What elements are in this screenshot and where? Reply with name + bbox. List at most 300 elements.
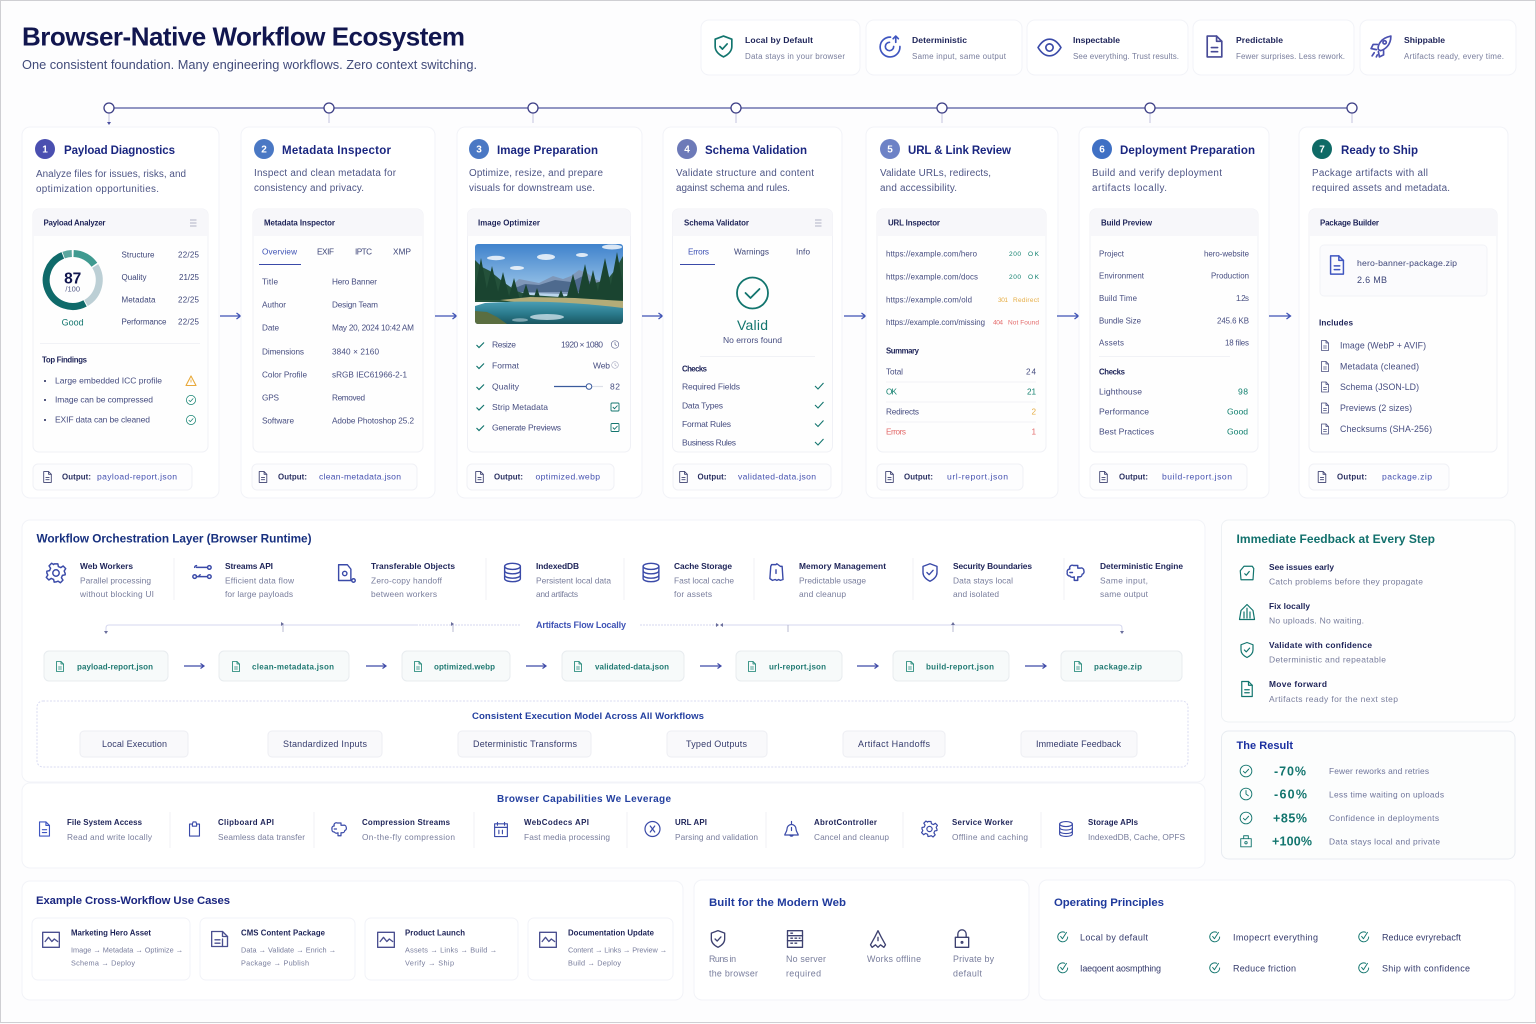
optimizer settings: Resize [492,339,516,349]
step 4 description: against schema and rules. [676,183,790,194]
URL summary: Errors [886,428,906,437]
top findings: Top Findings [42,356,88,365]
step number 5 [880,139,900,159]
step 5 description: Validate URLs, redirects, [880,168,991,179]
output chip: url-report.json [877,464,1023,490]
mock UI: Payload Analyzer [33,209,208,452]
panel: step 5 URL and Link Review [866,127,1058,498]
validator tabs: Info [796,248,810,257]
chip: Inspectable: See everything. Trust results. [1073,52,1179,61]
capability: Clipboard API [190,818,305,842]
metadata tabs [259,248,412,264]
build rows: 245.6 KB [1217,316,1249,326]
step 5 description: and accessibility. [880,183,957,194]
capability: AbrotController: AbrotController [814,818,877,827]
pill: Deterministic Transforms: Deterministic Transforms [473,739,578,749]
runtime: Deterministic Engine: same output [1100,589,1149,599]
build checks [1099,368,1248,437]
metadata rows: Design Team [332,301,378,310]
validator tabs: Errors [688,248,709,257]
metadata tabs: IPTC [355,248,372,257]
step 1 heading: Payload Diagnostics [64,145,175,157]
check list [682,364,824,448]
step 1 description [36,169,186,195]
mock UI: Payload Analyzer: Payload Analyzer [44,219,106,228]
step number 6 [1092,139,1112,159]
runtime: Security Boundaries: Security Boundaries [953,561,1032,571]
pill: Local Execution: Local Execution [102,739,167,749]
feedback: fix locally: Fix locally [1269,601,1310,611]
runtime: Transferable Objects [339,561,455,599]
runtime: IndexedDB: Persistent local data [536,575,611,585]
result: +100%: +100% [1272,834,1312,848]
output chip: package.zip: package.zip [1382,472,1432,482]
build rows: Project [1099,250,1125,258]
build rows [1099,250,1250,348]
runtime: Security Boundaries: Data stays local [953,575,1013,585]
runtime: Transferable Objects: between workers [371,589,437,599]
artifact: url-report.json [736,651,842,681]
URL rows: 301 [998,297,1008,304]
use case: CMS Content Package: Data → Validate → Enrich → [241,946,336,954]
chip: Shippable: Shippable [1404,35,1445,45]
chip: Deterministic [866,20,1022,75]
use case: Documentation Update: Content → Links → Preview → [568,946,667,954]
feedback: move forward: Artifacts ready for the next step [1269,694,1398,704]
runtime: Web Workers: Parallel processing [80,575,151,585]
URL rows: Redirect [1013,297,1039,304]
URL rows: https://example.com/hero [886,250,978,258]
top findings: EXIF data can be cleaned [55,415,150,425]
feedback: move forward [1242,679,1398,704]
feedback: see issues early: See issues early [1269,562,1334,572]
output chip: package.zip [1309,464,1449,490]
runtime: Cache Storage: for assets [674,589,712,599]
score donut: Good [62,318,84,328]
runtime: Memory Management: Predictable usage [799,575,866,585]
principle: reduce: Reduce evryrebacft [1382,932,1461,942]
use case: CMS Content Package: CMS Content Package [241,928,326,938]
mock UI: Metadata Inspector [253,209,423,452]
feedback: fix locally [1240,601,1364,626]
chip: Deterministic: Deterministic [912,35,967,45]
runtime: Deterministic Engine [1067,561,1183,599]
step 6 heading: Deployment Preparation [1120,145,1255,157]
chip: Local by Default [701,20,860,75]
metadata rows: Title [262,278,278,287]
capabilities heading: Browser Capabilities We Leverage [497,794,671,805]
metadata tabs: EXIF [317,248,334,257]
runtime: IndexedDB: IndexedDB [536,561,579,571]
step 2 description: Inspect and clean metadata for [254,168,397,179]
check list: Required Fields [682,382,740,392]
output chip: url-report.json: Output: [904,473,933,482]
mountain lake photo [473,244,626,326]
capability: Compression Streams: On-the-fly compression [362,832,455,842]
runtime: Streams API: for large payloads [225,589,293,599]
step 7 description [1312,168,1450,194]
step 4 description: Validate structure and content [676,168,814,179]
feedback: validate with confidence: Validate with confidence [1269,640,1372,650]
output chip: url-report.json: url-report.json [947,472,1008,482]
output chip: optimized.webp [467,464,614,490]
valid status: No errors found [723,335,782,345]
mock UI: Metadata Inspector: Metadata Inspector [264,219,335,228]
pill: Deterministic Transforms [458,731,591,757]
output chip: clean-metadata.json: clean-metadata.json [319,472,401,482]
feedback: validate with confidence [1241,640,1386,664]
chip: Shippable: Artifacts ready, every time. [1404,52,1504,61]
top findings: Image can be compressed [55,395,153,405]
feedback: move forward: Move forward [1269,679,1327,689]
built: private by default: default [953,968,983,978]
runtime: IndexedDB: and artifacts [536,589,578,599]
runtime: IndexedDB [505,561,611,599]
chip: Local by Default: Local by Default [745,35,813,45]
valid status: Valid [737,317,768,333]
score rows: 21/25 [179,273,200,282]
result: -70%: -70% [1274,764,1306,778]
result: -60%: Less time waiting on uploads [1329,790,1444,800]
arrow 2 to 3 [435,313,456,319]
mock UI: Schema Validator [672,209,832,452]
capability: Storage APIs: Storage APIs [1088,818,1139,827]
artifacts flow line [104,620,1124,634]
built: no server required [786,931,826,978]
panel: example use cases [22,881,683,1000]
use case: Product Launch: Verify → Ship [405,958,454,968]
panel: step 1 Payload Diagnostics [22,127,219,498]
score rows [122,251,200,327]
check list: Business Rules [682,438,736,448]
URL rows: https://example.com/docs [886,272,978,282]
panel: the result [1222,731,1515,859]
principle: ship with confidence: Ship with confidence [1382,964,1470,974]
result: -70%: Fewer reworks and retries [1329,766,1429,776]
built: no server required: required [786,968,821,978]
panel: step 3 Image Preparation [457,127,642,498]
runtime capability row [46,558,1183,600]
result: -70% [1240,764,1429,778]
output chip: package.zip: Output: [1337,473,1367,482]
output chip: clean-metadata.json: Output: [278,473,307,482]
pill: Local Execution [80,731,188,757]
score rows: Structure [122,251,155,260]
panel: workflow orchestration layer [22,520,1205,782]
step 7 heading: Ready to Ship [1341,145,1418,157]
capability: Clipboard API: Seamless data transfer [218,832,305,842]
runtime: Cache Storage: Fast local cache [674,575,734,585]
includes list: Includes [1319,319,1353,328]
quality slider [554,384,603,389]
step 3 description: Optimize, resize, and prepare [469,168,604,179]
metadata rows [262,278,414,426]
pill: Immediate Feedback: Immediate Feedback [1036,739,1122,749]
panel: immediate feedback [1222,520,1515,722]
step number 5: 5 [887,144,893,156]
step 6 description: artifacts locally. [1092,183,1167,194]
URL rows [886,250,1040,327]
metadata rows: Dimensions [262,348,304,357]
use cases heading: Example Cross-Workflow Use Cases [36,895,230,907]
output chip: build-report.json [1090,464,1247,490]
metadata rows: sRGB IEC61966-2-1 [332,371,407,380]
optimizer settings: 82 [610,381,620,391]
score rows: Performance [122,318,167,327]
step 5 heading: URL & Link Review [908,145,1011,157]
result: +85% [1240,812,1439,826]
title: Browser-Native Workflow Ecosystem [22,22,465,52]
use case: Documentation Update: Documentation Update [568,928,655,938]
metadata rows: GPS [262,394,280,403]
step 3 description: visuals for downstream use. [469,183,595,194]
capability: Service Worker [922,818,1028,842]
property chips [701,20,1516,75]
URL summary: OK [886,388,898,397]
metadata rows: Hero Banner [332,278,377,287]
validator tabs [680,248,810,264]
metadata rows: Software [262,417,294,426]
artifact chain [44,651,1182,681]
result: -60% [1240,788,1444,802]
result: +85%: +85% [1273,812,1307,826]
runtime: Cache Storage: Cache Storage [674,561,732,571]
artifact: payload-report.json [44,651,168,681]
output chip: optimized.webp: optimized.webp [536,472,600,482]
workflow timeline [104,103,1357,125]
arrow 3 to 4 [642,313,662,319]
use case: Product Launch: Assets → Links → Build → [405,946,497,954]
step 2 description: consistency and privacy. [254,183,364,194]
artifact: clean-metadata.json [219,651,349,681]
chip: Predictable: Predictable [1236,35,1283,45]
capability: File System Access: File System Access [67,818,143,827]
package file card: hero-banner-package.zip [1357,258,1457,268]
runtime: Web Workers: Web Workers [80,561,133,571]
pill: Immediate Feedback [1021,731,1137,757]
score rows: Metadata [122,296,156,305]
output chip: optimized.webp: Output: [494,473,523,482]
build rows: hero-website [1204,250,1250,258]
URL summary [886,347,1036,437]
capability: Service Worker: Service Worker [952,818,1013,827]
runtime: Memory Management: and cleanup [799,589,846,599]
build rows: Environment [1099,272,1145,280]
pill: Standardized Inputs: Standardized Inputs [283,739,368,749]
mock UI: Package Builder: Package Builder [1320,219,1379,228]
capability: AbrotController: Cancel and cleanup [814,832,889,842]
principle: second-row first item: Iaeqoent aosmpthing [1080,964,1161,974]
use case: Marketing Hero Asset: Image → Metadata → Optimize → [71,946,183,954]
mock UI: Build Preview [1090,209,1258,452]
build checks: 98 [1238,387,1248,397]
feedback: fix locally: No uploads. No waiting. [1269,616,1364,626]
mock UI: Image Optimizer: Image Optimizer [478,219,540,228]
built: runs in the browser [709,931,758,978]
mock UI: Image Optimizer [468,209,630,452]
panel: step 4 Schema Validation [663,127,842,498]
step 3 heading: Image Preparation [497,145,598,157]
step 2 description [254,168,397,194]
step number 7 [1312,139,1332,159]
URL rows: 200 [1009,274,1021,281]
optimizer settings: Format [492,360,520,370]
panel: built for the modern web [694,880,1029,1000]
step 6 description [1092,168,1222,194]
capability: Storage APIs: IndexedDB, Cache, OPFS [1088,832,1185,842]
chip: Local by Default: Data stays in your browser [745,52,845,61]
panel: operating principles [1039,880,1515,1000]
mock UI: Schema Validator: Schema Validator [684,219,749,228]
capability: URL API: Parsing and validation [675,832,758,842]
use case: Product Launch [365,918,518,980]
runtime: Memory Management [770,561,886,599]
capability: URL API [645,818,758,842]
built: private by default: Private by [953,954,995,964]
step number 6: 6 [1099,144,1105,156]
runtime: Deterministic Engine: Same input, [1100,575,1148,585]
chip: Predictable [1193,20,1354,75]
chip: Deterministic: Same input, same output [912,52,1007,61]
mock UI: Build Preview: Build Preview [1101,219,1153,228]
URL rows: 200 [1009,251,1021,258]
subtitle: One consistent foundation. Many engineering workflows. Zero context switching. [22,57,477,72]
build checks: Best Practices [1099,427,1154,437]
metadata rows: Author [262,301,286,310]
build rows: Production [1211,272,1249,280]
artifact: clean-metadata.json: clean-metadata.json [252,662,334,672]
step 7 description: required assets and metadata. [1312,183,1450,194]
includes list: Metadata (cleaned) [1340,361,1419,371]
arrow 5 to 6 [1057,313,1078,319]
metadata rows: Removed [332,394,365,403]
output chip: validated-data.json: Output: [698,473,726,482]
capability: Compression Streams [332,818,455,842]
feedback: see issues early [1240,562,1423,586]
optimizer settings: Quality [492,381,520,391]
artifact: package.zip [1061,651,1182,681]
principle: inspect everything: Imopecrt everything [1233,932,1318,942]
includes list: Previews (2 sizes) [1340,403,1412,413]
step number 7: 7 [1319,144,1325,156]
artifact: build-report.json: build-report.json [926,662,994,672]
artifacts flow line: Artifacts Flow Locally [536,620,626,630]
package file card: 2.6 MB [1357,275,1387,285]
built: runs in the browser: Runs in [709,954,736,964]
metadata rows: 3840 × 2160 [332,348,379,357]
step number 3: 3 [476,144,482,156]
capability: AbrotController [785,818,889,842]
panel: step 2 Metadata Inspector [241,127,435,498]
build rows: Bundle Size [1099,316,1142,326]
URL summary: Total [886,368,903,377]
runtime: Memory Management: Memory Management [799,561,886,571]
URL summary: 24 [1026,368,1036,377]
capability: WebCodecs API: Fast media processing [524,832,610,842]
step 2 heading: Metadata Inspector [282,145,392,157]
optimizer settings: Generate Previews [492,422,561,432]
output chip: build-report.json: Output: [1119,473,1148,482]
principle: local by default: Local by default [1080,932,1148,942]
score donut: 87 [64,270,81,288]
artifact: build-report.json [893,651,1009,681]
output chip: build-report.json: build-report.json [1162,472,1232,482]
runtime: Streams API: Streams API [225,561,273,571]
valid status [723,278,782,345]
built: no server required: No server [786,954,826,964]
metadata rows: Color Profile [262,371,307,380]
principle: reduce friction: Reduce friction [1233,964,1296,974]
mock UI: Package Builder [1309,209,1497,452]
result: +100%: Data stays local and private [1329,836,1440,846]
step 7 description: Package artifacts with all [1312,168,1428,179]
output chip: validated-data.json [673,464,831,490]
step 5 description [880,168,991,194]
capability: Compression Streams: Compression Streams [362,818,451,827]
capability: Service Worker: Offline and caching [952,832,1028,842]
check list: Format Rules [682,419,731,429]
artifact: url-report.json: url-report.json [769,662,826,672]
URL rows: 404 [993,320,1003,327]
step number 3 [469,139,489,159]
build rows: 18 files [1225,338,1249,348]
result: +85%: Confidence in deployments [1329,813,1439,823]
score rows: 22/25 [178,318,200,327]
artifact: validated-data.json: validated-data.json [595,662,669,672]
URL rows: OK [1028,251,1040,258]
step number 1 [35,139,55,159]
step number 4 [677,139,697,159]
URL summary: 1 [1031,428,1036,437]
URL summary: 2 [1031,408,1036,417]
build checks: Good [1227,407,1248,417]
arrow 4 to 5 [844,313,866,319]
step number 2 [254,139,274,159]
metadata rows: Adobe Photoshop 25.2 [332,417,414,426]
panel: step 6 Deployment Preparation [1079,127,1269,498]
result heading: The Result [1236,740,1293,752]
use case: Marketing Hero Asset [32,918,190,980]
mock UI: URL Inspector: URL Inspector [888,219,940,228]
panel: step 7 Ready to Ship [1299,127,1508,498]
step 6 description: Build and verify deployment [1092,168,1222,179]
capability: File System Access [40,818,153,842]
output chip: clean-metadata.json [252,464,417,490]
step 4 description [676,168,814,194]
build checks: Good [1227,427,1248,437]
runtime: Transferable Objects: Transferable Objects [371,561,455,571]
optimizer settings: 1920 × 1080 [561,339,603,349]
metadata rows: May 20, 2024 10:42 AM [332,324,414,333]
optimizer settings: Web [593,360,610,370]
optimizer settings [476,339,620,432]
step 4 heading: Schema Validation [705,145,807,157]
feedback heading: Immediate Feedback at Every Step [1236,532,1435,546]
capability: WebCodecs API: WebCodecs API [524,818,589,827]
build checks: Performance [1099,407,1149,417]
use case: CMS Content Package [200,918,355,980]
build checks: Lighthouse [1099,387,1142,397]
pill: Typed Outputs [667,731,767,757]
metadata tabs: Overview [262,248,297,257]
step 1 description: Analyze files for issues, risks, and [36,169,186,180]
built: runs in the browser: the browser [709,968,758,978]
URL summary: 21 [1027,388,1036,397]
step number 4: 4 [684,144,690,156]
capability: File System Access: Read and write locally [67,832,153,842]
built heading: Built for the Modern Web [709,897,846,909]
use case: Marketing Hero Asset: Marketing Hero Asset [71,928,151,938]
